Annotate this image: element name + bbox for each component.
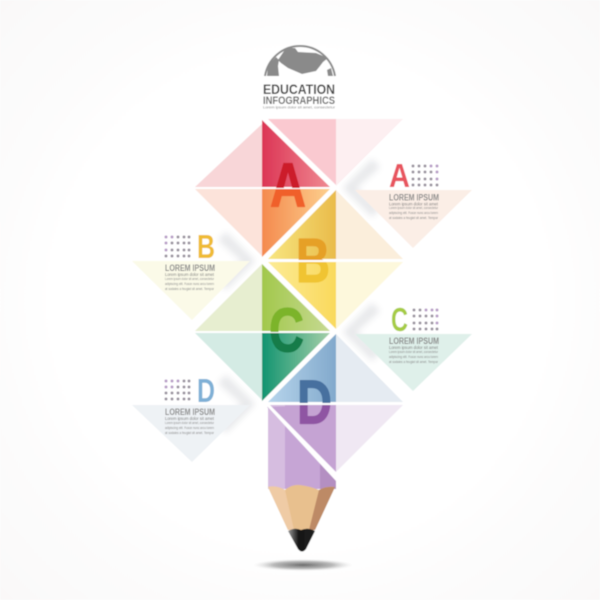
callout D: Lorem ipsum dolor sit amet, consectetur bbox=[165, 421, 215, 425]
pencil: purple body bbox=[264, 403, 340, 489]
letter C in column: C bbox=[269, 296, 304, 366]
title: EDUCATION bbox=[263, 82, 335, 97]
pencil: lead point bbox=[288, 529, 315, 552]
letter B in column: B bbox=[296, 227, 330, 296]
pencil: coloured column bbox=[262, 119, 336, 402]
letter D in column: D bbox=[297, 368, 332, 438]
title: Lorem ipsum dolor sit amet, consectetur bbox=[263, 106, 336, 110]
callout B: adipiscing elit. Fusce nunc arcu lorem bbox=[165, 282, 214, 286]
callout C bbox=[355, 301, 472, 391]
callout A: A bbox=[389, 157, 410, 194]
pale side triangles bbox=[195, 119, 403, 472]
letter A in column bbox=[270, 162, 306, 208]
letter A in column: A bbox=[270, 152, 306, 220]
logo: globe dome bbox=[265, 46, 335, 76]
callout C: LOREM IPSUM bbox=[389, 336, 439, 347]
callout B bbox=[132, 228, 250, 320]
letter A in column: A bbox=[270, 152, 306, 220]
callout C: C bbox=[391, 301, 408, 338]
callout B: Lorem ipsum dolor sit amet bbox=[165, 272, 215, 277]
fold shadows bbox=[218, 159, 380, 433]
callout A: at sodales a feugiat sit amet. Tempor bbox=[389, 216, 439, 220]
callout C: Lorem ipsum dolor sit amet bbox=[389, 345, 439, 350]
letter B in column bbox=[298, 238, 329, 284]
letter C in column bbox=[270, 307, 304, 353]
callout C: adipiscing elit. Fusce nunc arcu lorem bbox=[389, 355, 438, 359]
title: INFOGRAPHICS bbox=[263, 95, 335, 107]
callout A bbox=[355, 157, 472, 248]
letter B in column: B bbox=[296, 227, 330, 296]
callout C: Lorem ipsum dolor sit amet, consectetur bbox=[389, 350, 439, 354]
callout A: Lorem ipsum dolor sit amet, consectetur bbox=[389, 206, 439, 210]
callout A: LOREM IPSUM bbox=[389, 192, 439, 204]
callout B: at sodales a feugiat sit amet. Tempor bbox=[165, 287, 215, 291]
callout D: D bbox=[197, 372, 215, 409]
callout C: at sodales a feugiat sit amet. Tempor bbox=[389, 360, 439, 364]
callout A: adipiscing elit. Fusce nunc arcu lorem bbox=[389, 211, 438, 215]
callout D: LOREM IPSUM bbox=[165, 407, 215, 418]
callout D: adipiscing elit. Fusce nunc arcu lorem bbox=[165, 426, 214, 430]
letter D in column bbox=[299, 380, 331, 425]
callout D: Lorem ipsum dolor sit amet bbox=[165, 416, 215, 421]
infographic canvas bbox=[132, 44, 472, 570]
pencil: wood tip bbox=[268, 485, 335, 530]
callout A: Lorem ipsum dolor sit amet bbox=[389, 202, 439, 206]
letter D in column: D bbox=[297, 368, 332, 438]
callout D bbox=[132, 372, 250, 462]
callout B: Lorem ipsum dolor sit amet, consectetur bbox=[165, 277, 215, 281]
callout B: LOREM IPSUM bbox=[165, 263, 215, 274]
letter C in column: C bbox=[269, 296, 304, 366]
pencil ground shadow bbox=[253, 559, 353, 571]
title bbox=[263, 82, 336, 110]
callout D: at sodales a feugiat sit amet. Tempor bbox=[165, 431, 215, 435]
callout B: B bbox=[197, 228, 215, 265]
